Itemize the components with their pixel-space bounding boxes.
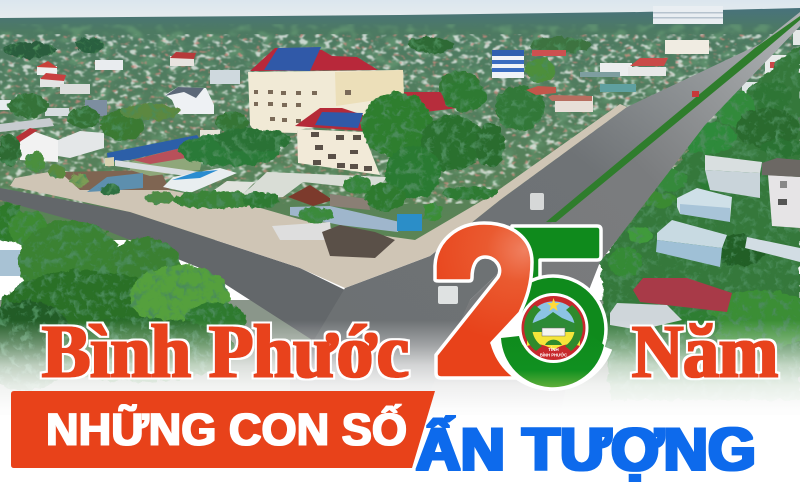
badge: number 25 with emblem <box>435 223 606 387</box>
faded ground beneath the title <box>0 300 800 415</box>
sky <box>0 0 800 19</box>
banner text: NHỮNG CON SỐ <box>46 404 407 455</box>
emblem mountain <box>528 312 579 334</box>
low roofs behind plaza <box>0 168 422 276</box>
number 5 lower tail outline <box>503 340 600 378</box>
emblem: BÌNH PHƯỚC <box>540 352 567 358</box>
left carriageway <box>290 12 800 415</box>
side road <box>0 188 345 345</box>
emblem building <box>542 328 565 336</box>
green median <box>546 16 800 222</box>
number 2 <box>435 223 532 378</box>
front building <box>295 108 380 175</box>
emblem laurels <box>524 305 583 351</box>
white base <box>0 425 800 500</box>
left neighbourhood houses <box>0 52 240 162</box>
foreground trees <box>0 79 505 390</box>
right-side houses <box>610 155 800 330</box>
emblem fields <box>527 332 580 350</box>
upper right town and tower block <box>492 6 800 112</box>
main building <box>248 47 404 133</box>
white counter beside the emblem <box>491 310 525 344</box>
title: Năm: Năm <box>632 310 778 394</box>
title: Bình Phước: Bình Phước <box>42 310 409 394</box>
right-hand tree mass <box>600 45 800 400</box>
distant town <box>0 8 800 240</box>
white truck <box>438 286 458 304</box>
red banner <box>11 391 435 468</box>
number 5 lower tail <box>501 330 604 387</box>
emblem gear <box>545 340 562 345</box>
rear red roof wing <box>404 92 458 112</box>
emblem sky <box>532 301 575 332</box>
red truck <box>692 91 699 97</box>
van <box>530 193 544 210</box>
headline: ẤN TƯỢNG: ẤN TƯỢNG <box>416 416 756 483</box>
number 5 ring <box>500 276 606 382</box>
emblem star <box>547 298 560 311</box>
white fade into the lower band <box>0 320 800 475</box>
emblem <box>518 293 588 363</box>
sports court <box>105 135 205 178</box>
number 5 top bar <box>512 226 601 290</box>
right carriageway <box>420 18 800 415</box>
banner shape <box>11 391 435 468</box>
emblem banner: TỈNH <box>548 346 559 352</box>
plaza and sidewalk <box>10 104 627 288</box>
neighbourhood tree clumps <box>0 37 590 166</box>
